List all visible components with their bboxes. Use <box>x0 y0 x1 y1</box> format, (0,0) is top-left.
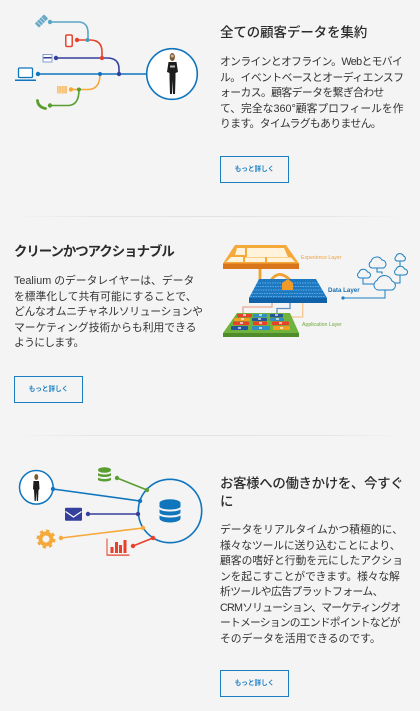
application layer <box>223 313 299 337</box>
connectors <box>243 268 303 317</box>
experience layer <box>223 245 299 269</box>
icon: badge <box>35 14 48 28</box>
cloud network <box>341 254 408 300</box>
text: section 1 <box>220 56 404 130</box>
heading: section 1: 全ての顧客データを集約 <box>220 25 367 40</box>
application layer label: Application Layer <box>302 322 342 328</box>
icon: phone <box>66 35 72 46</box>
icon: card <box>43 54 52 62</box>
database circle <box>138 479 202 543</box>
text: section 3: データをリアルタイムかつ積極的に、 <box>220 524 403 536</box>
text: section 2: どんなオムニチャネルソリューションや <box>14 306 203 318</box>
heading: section 2: クリーンかつアクショナブル <box>14 244 174 259</box>
customer circle <box>147 49 197 99</box>
text: section 3 <box>220 524 403 645</box>
text: section 2: ようにします。 <box>14 337 84 349</box>
text: section 3: 析ツールや広告プラットフォーム、 <box>220 586 383 598</box>
connector dots <box>51 476 155 548</box>
icon: laptop <box>15 68 36 81</box>
text: section 2: Tealium のデータレイヤーは、データ <box>14 275 194 287</box>
heading: section 3: に <box>220 494 233 509</box>
experience layer label: Experience Layer <box>301 255 342 261</box>
button: section 3 <box>220 670 289 697</box>
button: section 1: もっと詳しく <box>235 166 274 172</box>
icon: phone handset <box>38 100 46 108</box>
layers diagram <box>223 245 408 337</box>
text: section 3: 様々なツールに送り込むことにより、 <box>220 540 400 552</box>
text: section 3: そのデータを活用できるのです。 <box>220 633 381 645</box>
button: section 2 <box>14 376 83 402</box>
button: section 1 <box>220 156 289 182</box>
text: section 1: ル。イベントベースとオーディエンスフ <box>220 72 403 84</box>
text: section 3: CRMソリューション、マーケティングオ <box>220 602 400 614</box>
icon diagram: data sources to customer <box>15 14 198 110</box>
text: section 1: て、完全な360°顧客プロフィールを作 <box>220 103 404 115</box>
button: section 3: もっと詳しく <box>235 680 274 687</box>
text: section 1: ります。タイムラグもありません。 <box>220 118 381 130</box>
customer circle <box>20 470 53 504</box>
text: section 3: ートメーションのエンドポイントなどが <box>220 617 400 629</box>
heading: section 3: お客様への働きかけを、今すぐ <box>220 476 403 491</box>
orange tag <box>282 279 293 290</box>
data layer <box>249 279 327 303</box>
text: section 2: マーケティング技術からも利用できる <box>14 322 196 334</box>
icon: envelope <box>65 508 82 521</box>
integration diagram <box>18 467 202 556</box>
text: section 1: ォーカス。顧客データを繋ぎ合わせ <box>220 87 384 99</box>
text: section 3: ンを起こすことができます。様々な解 <box>220 571 400 583</box>
text: section 3: 顧客の嗜好と行動を元にしたアクショ <box>220 555 403 567</box>
text: section 2 <box>14 274 203 349</box>
text: section 2: を標準化して共有可能にすることで、 <box>14 291 197 303</box>
icon: bar chart <box>106 538 130 556</box>
icon: barcode <box>57 86 67 94</box>
heading: section 3 <box>220 476 403 509</box>
text: section 1: オンラインとオフライン。Webとモバイ <box>220 56 402 68</box>
icon: gear <box>38 531 54 547</box>
icon: stack <box>98 467 111 482</box>
data layer label: Data Layer <box>328 287 360 294</box>
button: section 2: もっと詳しく <box>29 386 68 392</box>
